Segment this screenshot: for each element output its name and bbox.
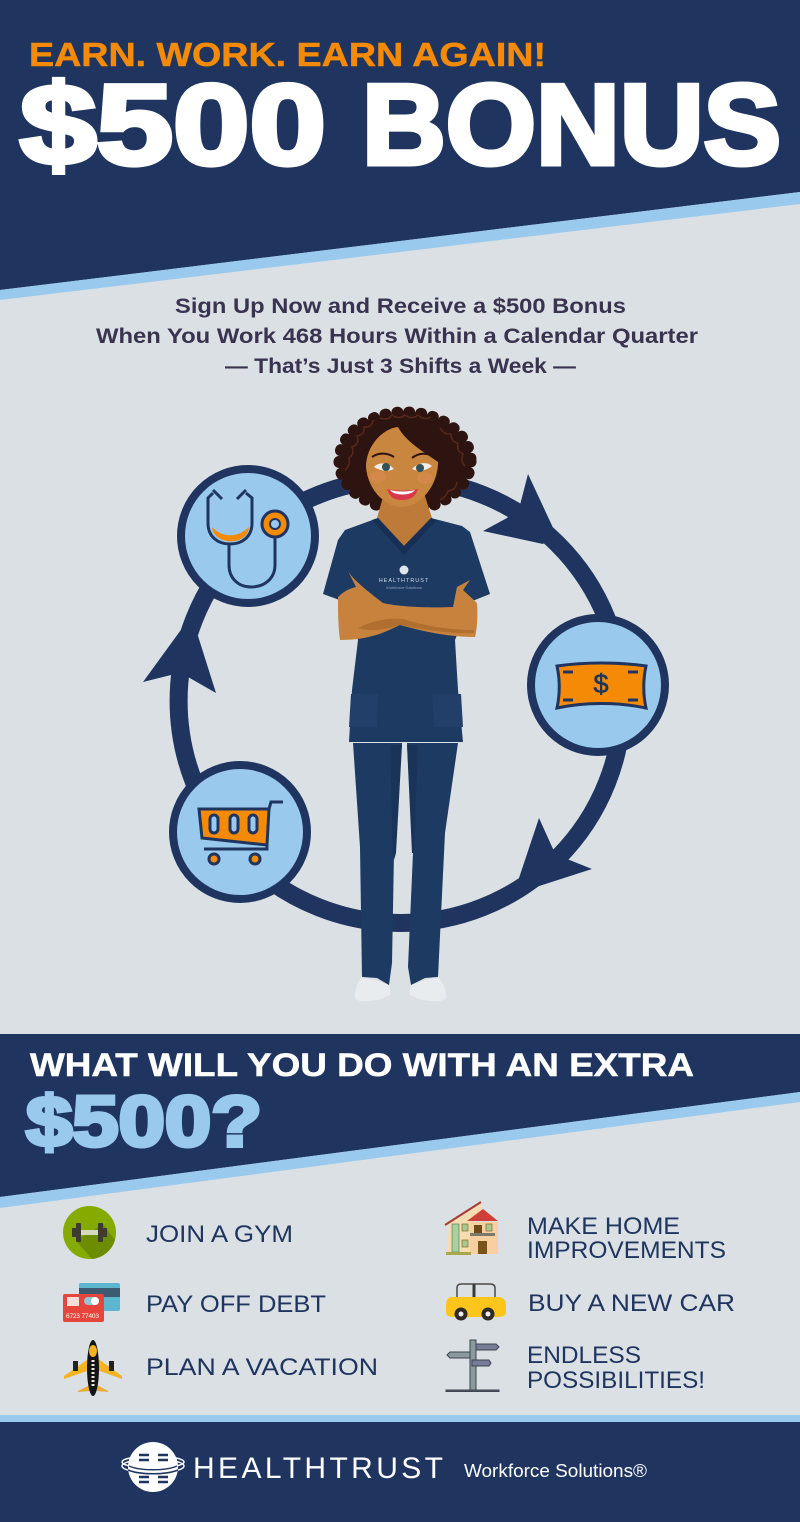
hair <box>339 412 471 510</box>
logo wordmark: HEALTHTRUST <box>193 1452 443 1485</box>
logo tagline: Workforce Solutions® <box>464 1461 647 1481</box>
list item: pay off debt: PAY OFF DEBT <box>146 1291 326 1318</box>
title: $500 bonus <box>20 62 781 189</box>
shirt logo: HEALTHTRUST <box>379 578 429 584</box>
list item: buy a new car: BUY A NEW CAR <box>528 1290 735 1317</box>
list item: make home improvements: IMPROVEMENTS <box>527 1237 726 1264</box>
section banner: what will you do <box>0 1034 800 1208</box>
trousers <box>353 743 458 985</box>
subtitle text <box>96 295 698 378</box>
icon: stethoscope circle <box>181 469 315 603</box>
footer band <box>0 1415 800 1522</box>
list item: plan a vacation: PLAN A VACATION <box>146 1354 378 1381</box>
list item: endless possibilities <box>527 1342 705 1394</box>
shirt logo <box>379 566 429 590</box>
icon: credit cards: 6723 77403 <box>66 1313 99 1320</box>
list item: endless possibilities: ENDLESS <box>527 1342 641 1369</box>
heading: $500?: $500? <box>26 1083 262 1162</box>
header banner <box>0 0 800 300</box>
subtitle text: When You Work 468 Hours Within a Calendar Quarter <box>96 325 698 348</box>
icon: dumbbell <box>63 1206 116 1259</box>
list item: make home improvements <box>527 1213 726 1264</box>
icon: car <box>446 1284 506 1320</box>
mouth <box>387 489 418 500</box>
icon: credit cards <box>63 1283 120 1322</box>
logo globe <box>122 1442 184 1492</box>
arrow: left <box>143 627 216 693</box>
icon: shopping cart circle <box>173 765 307 899</box>
subtitle text: Sign Up Now and Receive a $500 Bonus <box>175 295 626 318</box>
scrub top <box>323 518 490 742</box>
icon: airplane <box>64 1340 122 1396</box>
list item: endless possibilities: POSSIBILITIES! <box>527 1367 705 1394</box>
nurse figure <box>323 412 490 1001</box>
arrow: top right <box>483 474 555 544</box>
cycle ring with arrows <box>143 474 623 923</box>
subtitle text: — That’s Just 3 Shifts a Week — <box>225 355 576 378</box>
shoes <box>355 976 446 1001</box>
heading: earn work earn again: EARN. WORK. EARN AGAIN! <box>29 36 546 73</box>
shirt logo: Workforce Solutions <box>386 585 422 590</box>
heading: what will you do with an extra: WHAT WILL YOU DO WITH AN EXTRA <box>30 1047 694 1083</box>
neck <box>377 490 432 547</box>
list item: join a gym: JOIN A GYM <box>146 1221 293 1248</box>
eyes <box>372 454 434 472</box>
list item: make home improvements: MAKE HOME <box>527 1213 680 1240</box>
face <box>366 427 438 507</box>
title: $500 bonus: $500 <box>20 62 326 189</box>
icon: signpost <box>446 1340 499 1392</box>
icon: house <box>445 1202 498 1255</box>
pockets <box>349 694 463 727</box>
arrow: bottom right <box>519 818 592 888</box>
title: $500 bonus: BONUS <box>362 62 781 189</box>
icon: money circle: $ <box>593 669 609 699</box>
footer logo <box>122 1442 647 1492</box>
crossed arms <box>338 571 477 640</box>
icon: money circle <box>531 618 665 752</box>
